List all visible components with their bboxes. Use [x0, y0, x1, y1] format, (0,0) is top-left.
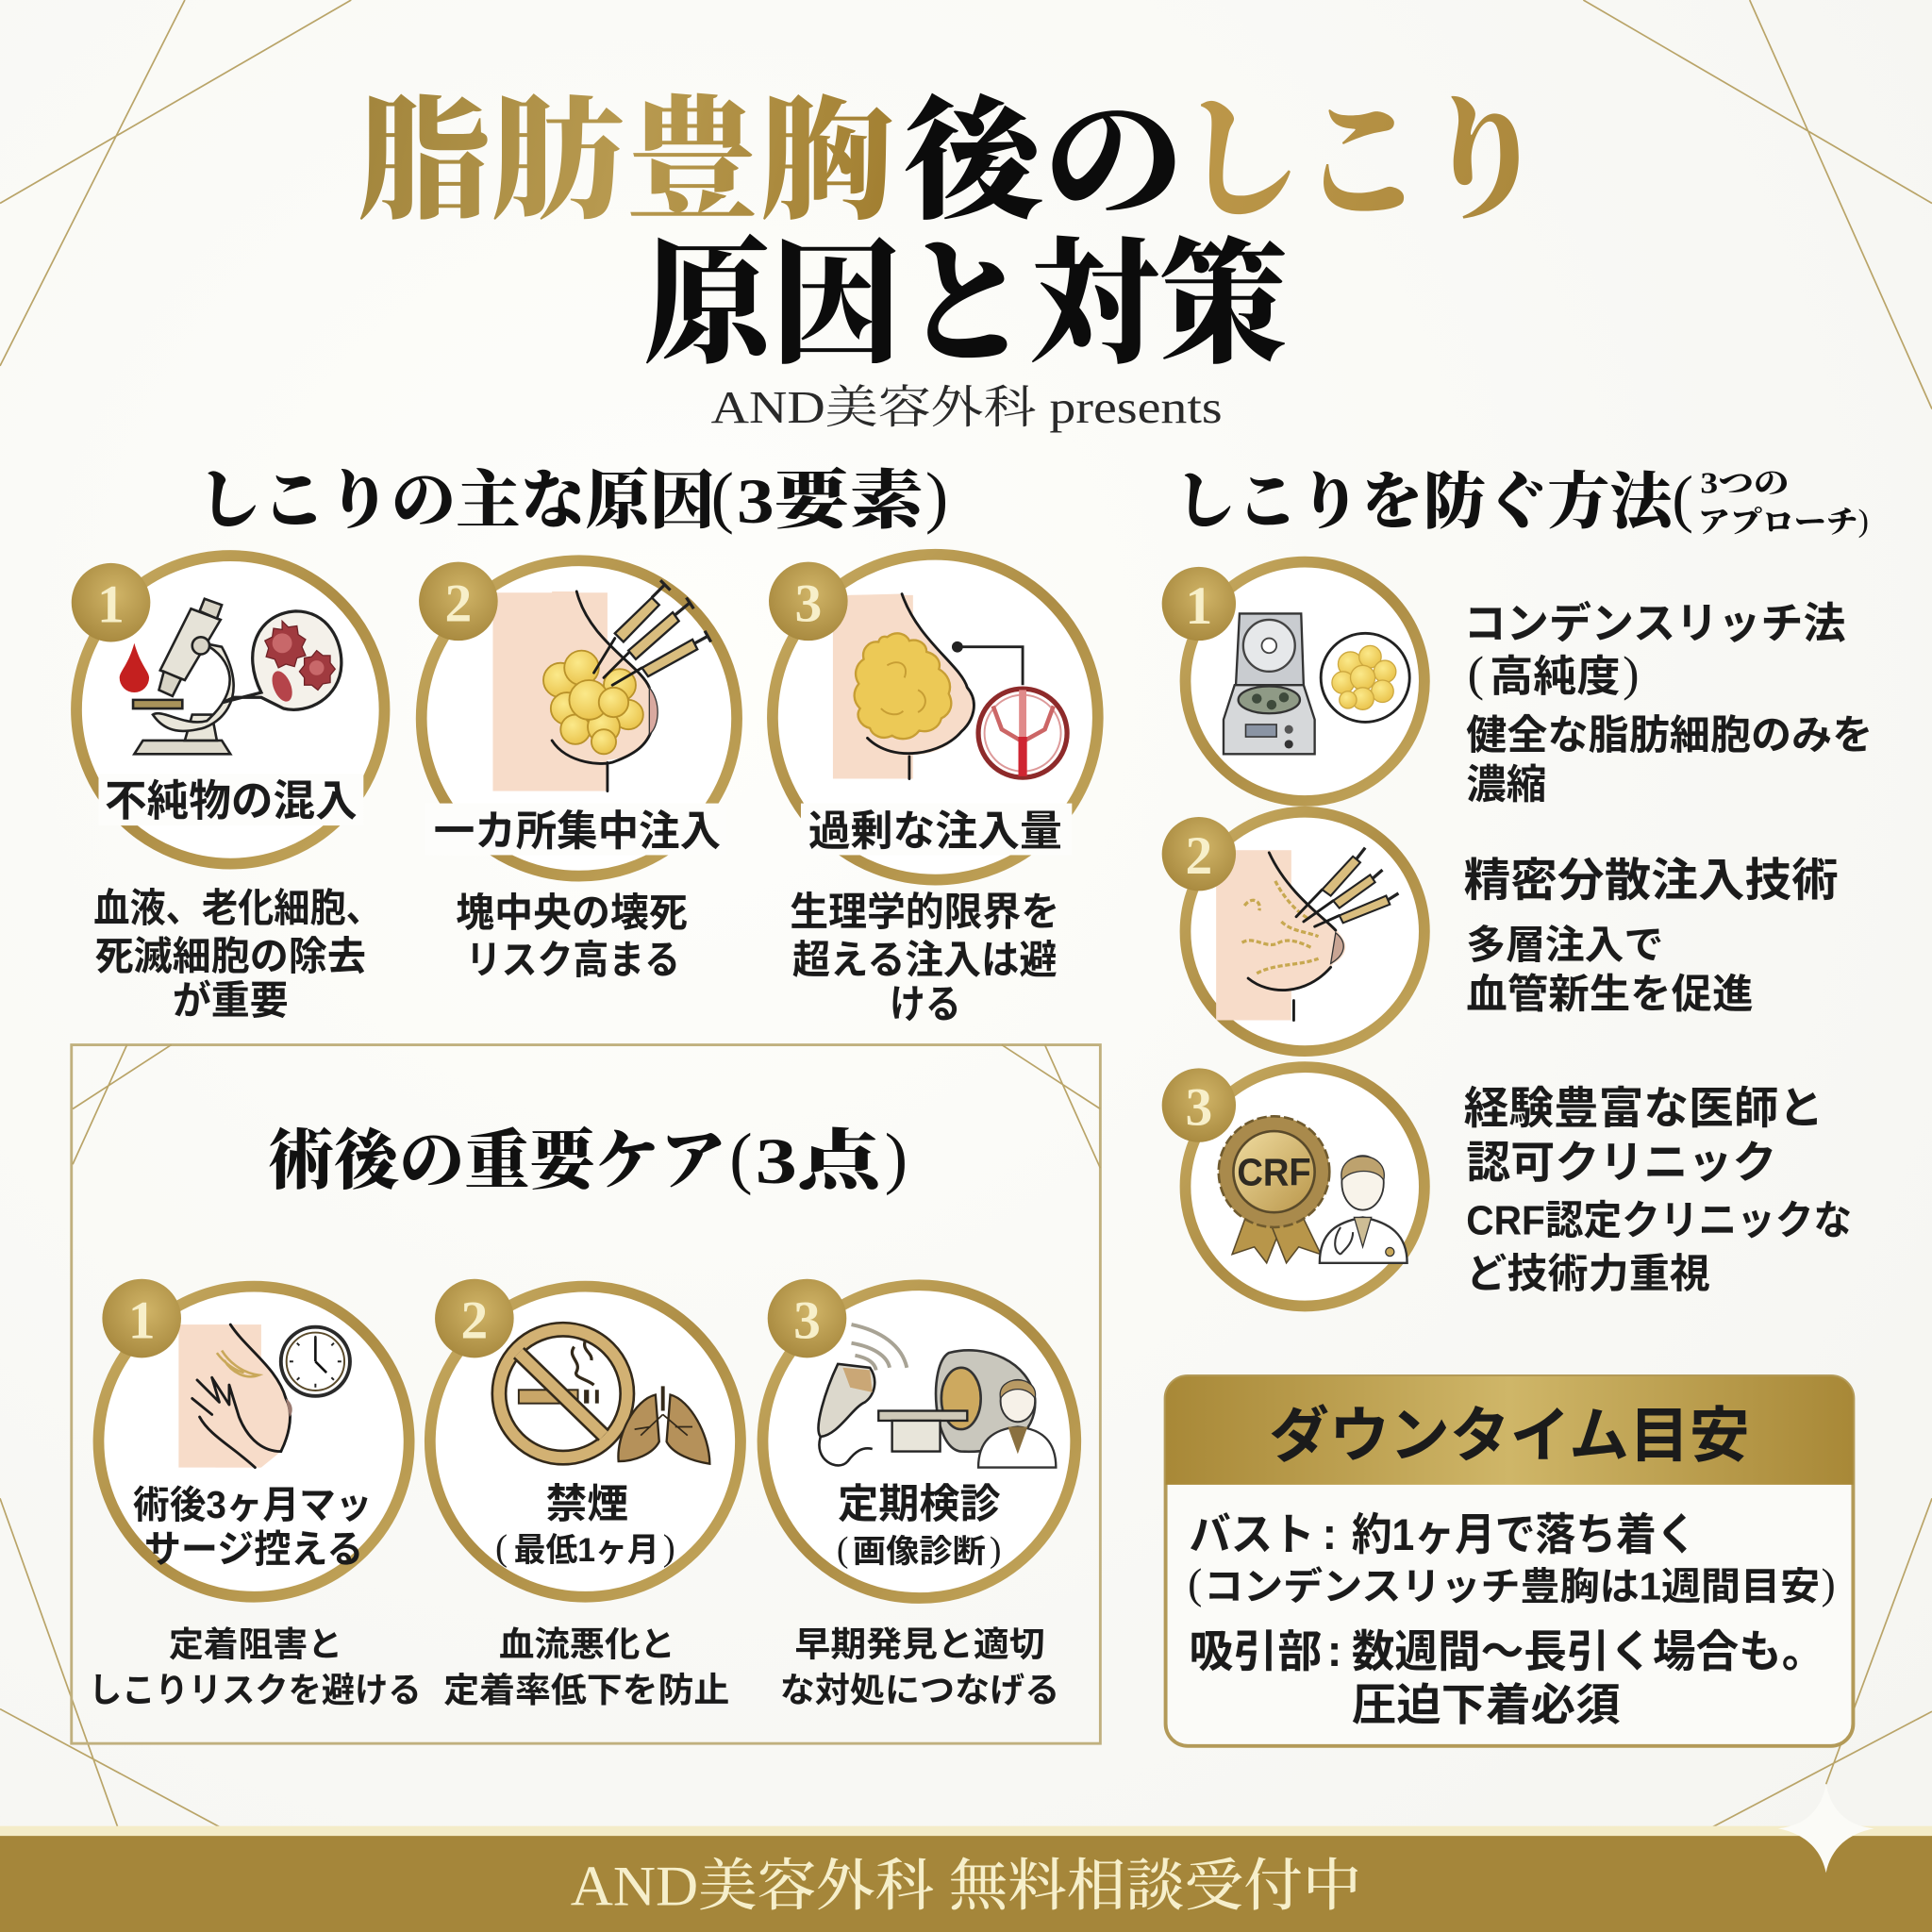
icon: no smoking sign [499, 1329, 627, 1457]
icon: dish of fat cells [1321, 633, 1409, 722]
title: 脂肪豊胸 [356, 88, 894, 236]
text: experienced doctor: CRF認定クリニックな [1466, 1199, 1852, 1244]
downtime text: 圧迫下着必須 [1352, 1679, 1621, 1729]
panel: prevention 3 experienced doctor [1162, 1067, 1424, 1306]
text: experienced doctor: 経験豊富な医師と [1464, 1083, 1824, 1133]
heading: post-op care: ) [885, 1119, 908, 1195]
badge: 2 [1185, 826, 1212, 886]
text: dispersed injection [1464, 856, 1839, 1017]
heading: causes: 3要素 [737, 465, 926, 537]
icon: microscope [133, 599, 234, 754]
text: care 2 description: 定着率低下を防止 [443, 1671, 729, 1709]
text: experienced doctor [1464, 1083, 1852, 1297]
footer band [0, 1826, 1932, 1932]
icon: doctor [1320, 1156, 1407, 1263]
text: cause 3 description: 生理学的限界を [790, 890, 1059, 934]
badge: 2 [445, 574, 472, 633]
downtime text: 約1ヶ月で落ち着く [1352, 1509, 1697, 1559]
heading: causes: ) [925, 458, 948, 535]
text: dispersed injection: 精密分散注入技術 [1464, 856, 1839, 907]
icon: breast with large fat mass [833, 594, 974, 778]
icon: hand on breast [178, 1324, 292, 1468]
icon: centrifuge [1224, 613, 1315, 754]
title: 後の [903, 88, 1184, 236]
icon: CRF medal [1219, 1116, 1329, 1263]
text: experienced doctor: 認可クリニック [1466, 1138, 1776, 1188]
label: 画像診断 [853, 1534, 986, 1570]
label: 不純物の混入 [105, 777, 358, 825]
heading: prevention [1174, 462, 1869, 539]
badge [1162, 1068, 1236, 1142]
subtitle: AND美容外科 presents [711, 383, 1223, 433]
label: 一カ所集中注入 [434, 808, 721, 855]
label: 最低1ヶ月 [514, 1532, 659, 1569]
text: care 1 description: しこりリスクを避ける [89, 1671, 422, 1709]
downtime header: ダウンタイム目安 [1269, 1402, 1750, 1470]
heading: prevention: ( [1672, 462, 1693, 534]
panel: post-op care [72, 1045, 1100, 1743]
panel: prevention 1 condense rich [1162, 562, 1424, 801]
care 3 regular check-up [762, 1279, 1075, 1598]
heading: causes [197, 458, 948, 537]
label: 禁煙 [546, 1482, 628, 1527]
text: care 2 description [443, 1624, 729, 1709]
label [495, 1482, 675, 1569]
downtime header [1166, 1376, 1853, 1485]
text: condense rich: コンデンスリッチ法 [1464, 600, 1846, 648]
text: care 1 description [89, 1624, 422, 1709]
label: ) [990, 1530, 1001, 1570]
downtime text: ) [1821, 1559, 1836, 1607]
text: care 3 description: な対処につなげる [780, 1671, 1059, 1709]
badge: 3 [794, 574, 822, 633]
text: cause 3 description: ける [890, 982, 961, 1026]
footer band: AND美容外科 無料相談受付中 [571, 1854, 1361, 1917]
text: condense rich: ( [1468, 646, 1484, 701]
title: 原因と対策 [643, 231, 1288, 381]
text: experienced doctor: ど技術力重視 [1466, 1252, 1710, 1297]
heading: prevention: アプローチ [1698, 506, 1858, 539]
text: condense rich [1464, 600, 1873, 808]
text: cause 3 description [790, 890, 1059, 1026]
title: しこり [1180, 88, 1545, 236]
text: cause 1 description: が重要 [173, 978, 289, 1023]
text: care 3 description: 早期発見と適切 [794, 1624, 1045, 1663]
downtime text: バスト [1189, 1509, 1315, 1559]
panel: cause 1 impurities [72, 556, 385, 864]
text: dispersed injection: 多層注入で [1466, 923, 1663, 967]
icon: doctor [978, 1380, 1056, 1468]
badge [769, 562, 848, 641]
badge [1162, 817, 1236, 891]
label: 定期検診 [838, 1482, 1001, 1527]
heading: post-op care: 3点 [756, 1124, 888, 1197]
heading: causes: しこりの主な原因 [197, 465, 715, 537]
heading: prevention: 3つの [1700, 466, 1789, 499]
icon: ultrasound probe [819, 1324, 907, 1465]
badge: 1 [97, 575, 125, 635]
downtime text: ( [1188, 1559, 1202, 1607]
label [133, 1483, 372, 1571]
badge: 2 [460, 1291, 488, 1350]
icon: CRF medal: CRF [1237, 1150, 1311, 1193]
text: cause 1 description: 死滅細胞の除去 [95, 934, 366, 978]
text: condense rich: ) [1623, 646, 1640, 701]
label: ) [663, 1528, 675, 1569]
icon: clock [281, 1327, 350, 1396]
callout: vessel detail [952, 641, 1067, 777]
heading: post-op care [269, 1119, 908, 1197]
badge [1162, 567, 1236, 641]
label: 術後3ヶ月マッ [133, 1483, 372, 1526]
downtime text: 数週間〜長引く場合も。 [1352, 1626, 1824, 1676]
title [356, 88, 1545, 381]
text: care 2 description: 血流悪化と [499, 1624, 675, 1663]
heading: prevention: しこりを防ぐ方法 [1174, 469, 1679, 537]
text: condense rich: 高純度 [1490, 653, 1621, 701]
text: cause 1 description: 血液、老化細胞、 [93, 886, 382, 930]
badge: 1 [128, 1291, 156, 1350]
label: ( [837, 1530, 848, 1570]
panel: cause 3 excess volume [769, 555, 1098, 880]
label: サージ控える [144, 1527, 363, 1571]
badge [768, 1279, 846, 1357]
heading: causes: ( [711, 458, 734, 535]
text: care 1 description: 定着阻害と [169, 1624, 342, 1663]
text: cause 3 description: 超える注入は避 [792, 938, 1058, 982]
heading: post-op care: 術後の重要ケア [269, 1124, 725, 1197]
badge: 1 [1185, 576, 1212, 636]
text: cause 2 description [456, 891, 688, 982]
text: condense rich: 濃縮 [1466, 762, 1546, 808]
text: cause 2 description: 塊中央の壊死 [456, 891, 688, 935]
badge: 3 [793, 1291, 821, 1350]
care 1 massage [98, 1279, 409, 1597]
text: cause 1 description [93, 886, 382, 1023]
badge [72, 563, 150, 641]
label: 過剰な注入量 [808, 808, 1062, 855]
badge [435, 1279, 514, 1357]
icon: MRI scanner [878, 1350, 1035, 1452]
label [837, 1482, 1001, 1570]
text: condense rich: 健全な脂肪細胞のみを [1466, 713, 1873, 758]
text: dispersed injection: 血管新生を促進 [1466, 972, 1754, 1017]
icon: sparkle [1778, 1784, 1874, 1873]
downtime text: : [1322, 1508, 1337, 1558]
downtime text: 吸引部 [1189, 1626, 1322, 1676]
heading: post-op care: ( [729, 1119, 753, 1195]
badge [419, 562, 498, 641]
badge: 3 [1185, 1077, 1212, 1137]
icon: breast with dispersed syringes [1216, 848, 1398, 1020]
icon: lungs [618, 1386, 709, 1464]
downtime text: : [1327, 1625, 1341, 1675]
panel: cause 2 single-site injection [419, 560, 737, 876]
icon: breast with fat cluster and syringes [492, 580, 711, 791]
icon: magnified cells [223, 611, 341, 709]
icon: blood drop [120, 643, 149, 692]
text: cause 2 description: リスク高まる [466, 938, 680, 982]
panel: prevention 2 dispersed injection [1162, 812, 1424, 1051]
heading: prevention: ) [1858, 504, 1869, 539]
downtime text: コンデンスリッチ豊胸は1週間目安 [1204, 1564, 1820, 1607]
badge [102, 1279, 181, 1357]
care 2 no smoking [430, 1279, 741, 1597]
downtime text [1188, 1508, 1836, 1729]
label: ( [495, 1528, 508, 1569]
text: care 3 description [780, 1624, 1059, 1709]
panel: downtime [1166, 1376, 1853, 1746]
